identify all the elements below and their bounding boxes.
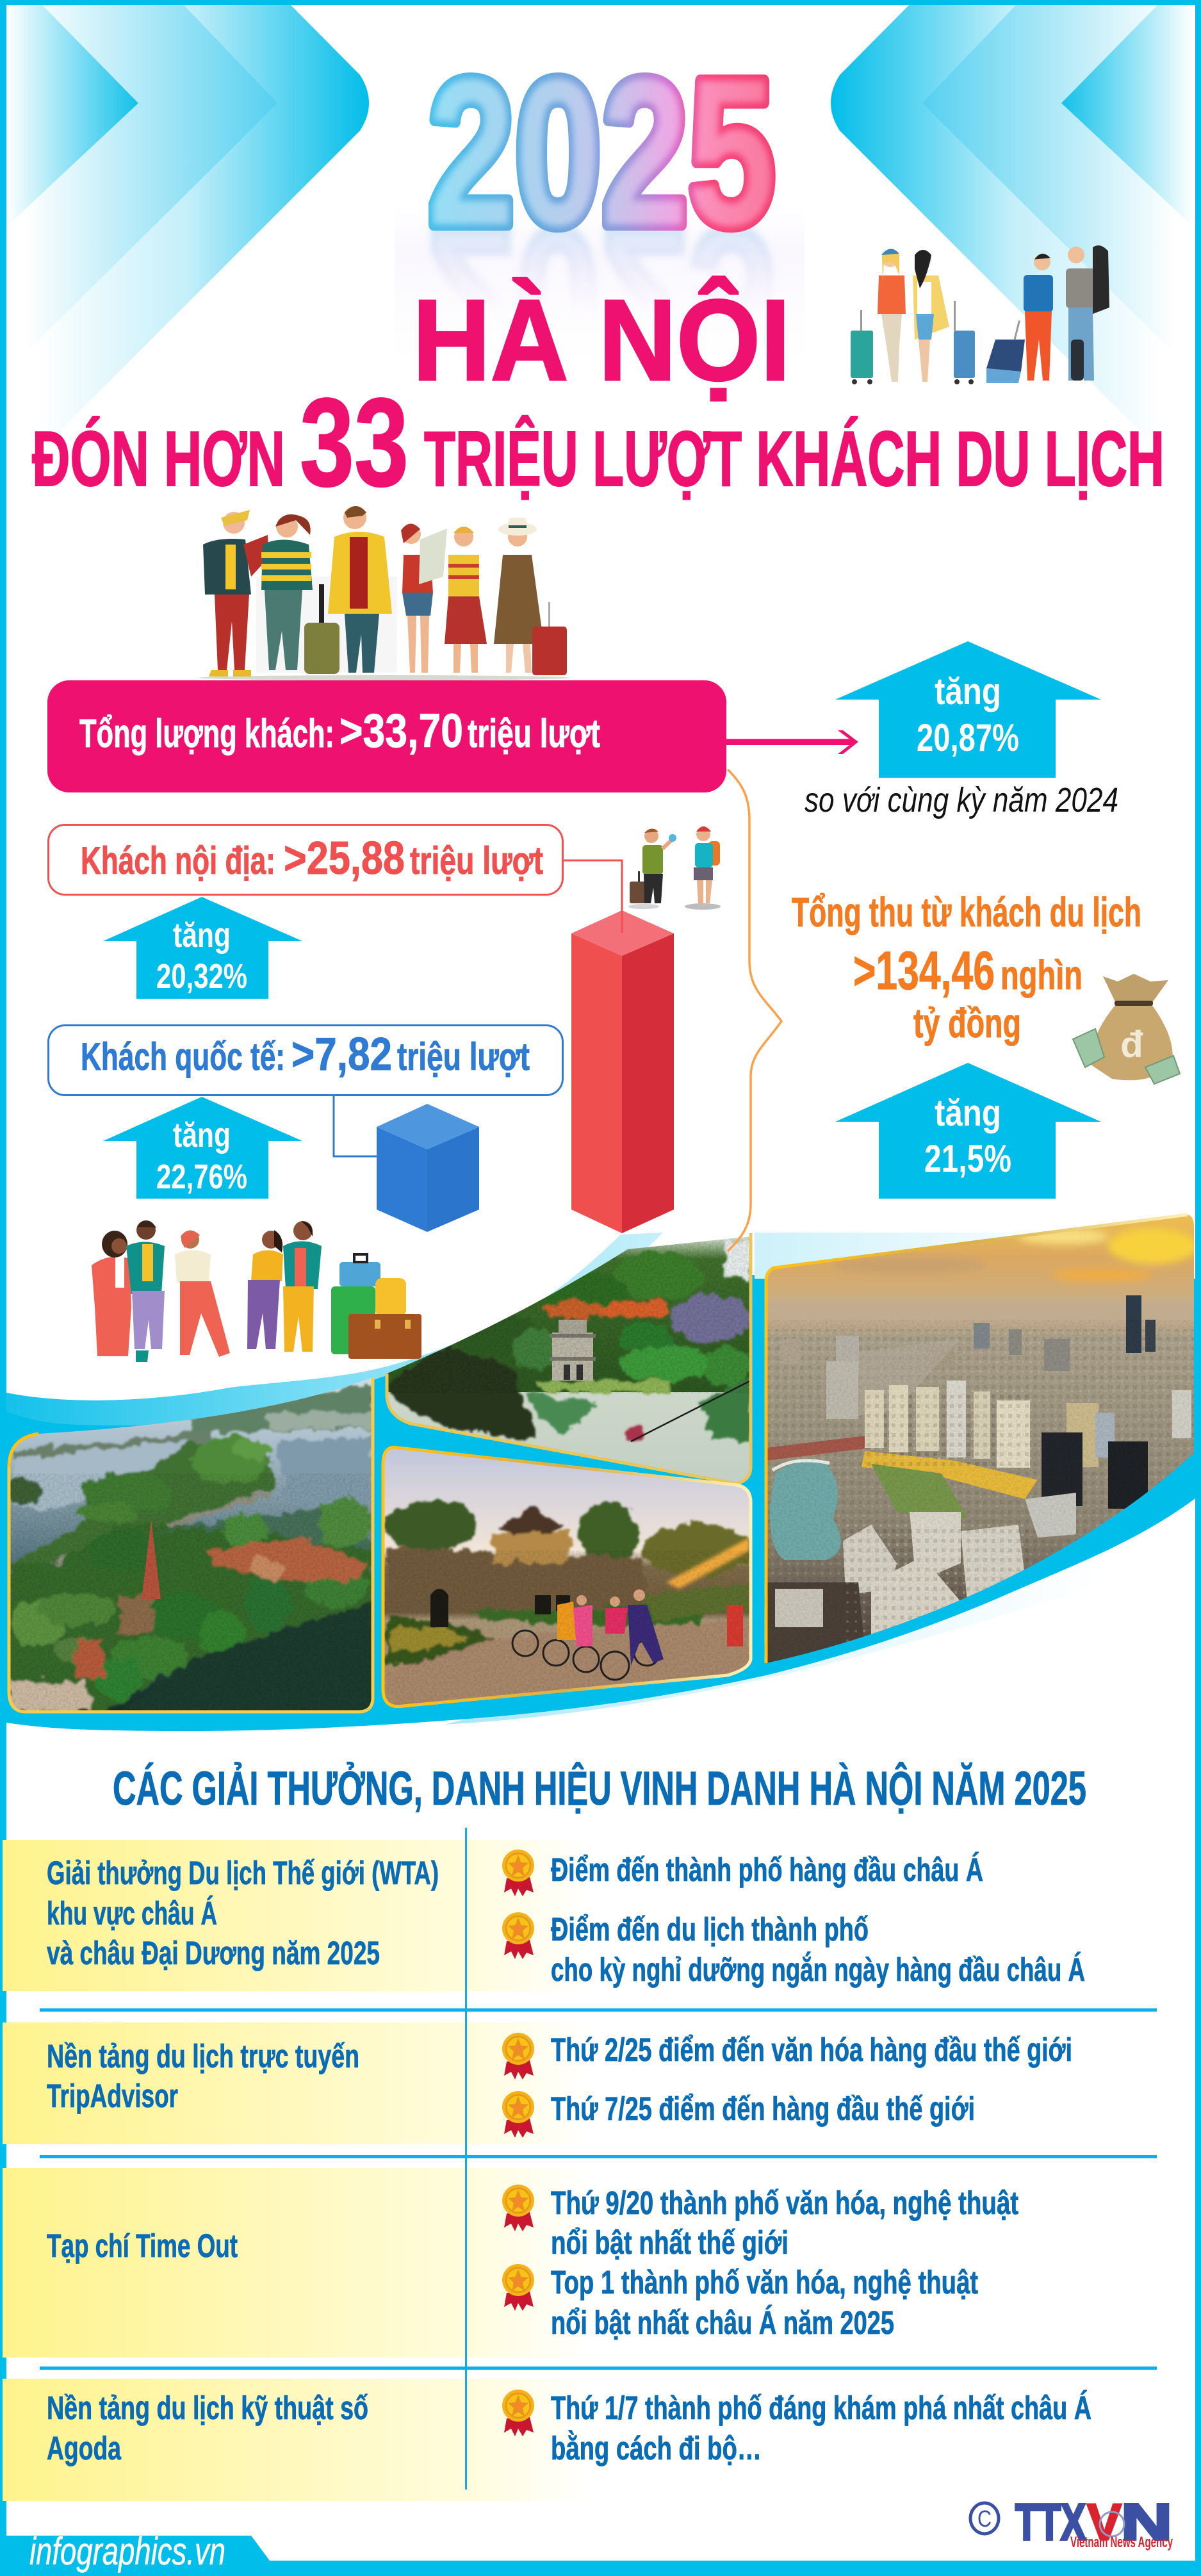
logo: TTXVN: N xyxy=(1121,2493,1172,2550)
year 2025 title: 2025 xyxy=(428,36,775,268)
award rows background xyxy=(3,1840,592,2501)
year 2025 title xyxy=(395,36,805,418)
logo: TTXVN: TTX xyxy=(1015,2493,1086,2550)
red column: domestic visitors xyxy=(571,910,674,1233)
arrow: total to growth xyxy=(726,730,858,754)
connector: international box to cube xyxy=(334,1095,377,1156)
footer site name: infographics.vn xyxy=(29,2530,225,2573)
WTA title 2 xyxy=(551,1911,1085,1988)
Agoda title xyxy=(551,2390,1091,2466)
illustration: tourists with suitcases top right xyxy=(851,245,1109,384)
domestic visitors panel: triệu lượt xyxy=(410,839,543,882)
illustration: small tourists xyxy=(628,826,721,910)
domestic visitors panel: >25,88 xyxy=(284,833,405,884)
Time Out title 2: nổi bật nhất châu Á năm 2025 xyxy=(551,2304,894,2341)
table dividers xyxy=(40,1828,1157,2490)
growth arrow 20,32% xyxy=(103,897,302,999)
year 2025 title: 2025 xyxy=(428,185,775,418)
icon: medal xyxy=(502,1850,534,1896)
icon: money bag xyxy=(1073,974,1180,1084)
blue column: international visitors xyxy=(377,1104,479,1232)
light cyan fade below swoosh xyxy=(445,1498,1195,1725)
heading: đón hơn 33 triệu lượt khách du lịch xyxy=(32,372,1164,513)
year 2025 title: 2025 xyxy=(428,36,775,268)
Agoda title: bằng cách đi bộ… xyxy=(551,2429,762,2466)
growth arrow 21,5%: 21,5% xyxy=(924,1137,1011,1180)
international visitors panel: triệu lượt xyxy=(397,1035,530,1078)
organisation: Agoda: Agoda xyxy=(47,2430,121,2466)
icon: medal xyxy=(502,1912,534,1959)
illustration: group of six travellers xyxy=(199,506,570,680)
total visitors panel: triệu lượt xyxy=(468,712,600,756)
organisation: TripAdvisor: TripAdvisor xyxy=(47,2078,178,2114)
organisation: WTA: Giải thưởng Du lịch Thế giới (WTA) xyxy=(47,1855,439,1891)
total visitors panel xyxy=(47,680,726,792)
comparison note: so với cùng kỳ năm 2024 xyxy=(805,781,1118,819)
logo: TTXVN xyxy=(970,2493,1173,2551)
light cyan swoosh band xyxy=(6,1233,663,1425)
international visitors panel: >7,82 xyxy=(291,1029,392,1080)
photo: Hanoi skyline at sunset xyxy=(766,1211,1198,1666)
illustration: five friends with luggage xyxy=(92,1220,421,1362)
bracket linking visitors to revenue xyxy=(728,769,781,1251)
icon: money bag: đ xyxy=(1120,1024,1143,1065)
Time Out title 1: Thứ 9/20 thành phố văn hóa, nghệ thuật xyxy=(551,2185,1018,2221)
growth arrow 21,5% xyxy=(835,1063,1101,1199)
photo: Thang Long citadel with cyclists xyxy=(381,1445,753,1710)
growth arrow 20,32%: tăng xyxy=(173,916,231,955)
revenue value: >134,46 xyxy=(853,940,995,1001)
total visitors panel: Tổng lượng khách: xyxy=(79,712,334,756)
heading: đón hơn 33 triệu lượt khách du lịch: ĐÓN HƠN xyxy=(32,415,285,502)
logo: TTXVN: V xyxy=(1087,2493,1122,2550)
revenue value: nghìn xyxy=(1001,952,1083,998)
organisation: TripAdvisor xyxy=(47,2038,359,2114)
growth arrow 22,76% xyxy=(103,1097,302,1199)
cyan swoosh background xyxy=(6,1275,1195,1731)
Time Out title 1 xyxy=(551,2185,1018,2261)
icon: medal xyxy=(502,2264,534,2311)
connector: domestic box to column xyxy=(563,860,622,933)
logo: TTXVN: C xyxy=(977,2506,992,2532)
award row: Agoda xyxy=(47,2390,1091,2466)
growth arrow 22,76%: tăng xyxy=(173,1116,231,1154)
organisation: Agoda: Nền tảng du lịch kỹ thuật số xyxy=(47,2390,368,2426)
WTA title 1: Điểm đến thành phố hàng đầu châu Á xyxy=(551,1851,983,1888)
heading: Hà Nội: HÀ NỘI xyxy=(413,276,790,405)
organisation: WTA: và châu Đại Dương năm 2025 xyxy=(47,1935,380,1971)
international visitors panel xyxy=(49,1025,562,1095)
award row: Time Out xyxy=(47,2185,1018,2341)
growth arrow 21,5%: tăng xyxy=(935,1092,1001,1134)
organisation: Time Out: Tạp chí Time Out xyxy=(47,2227,238,2264)
total visitors panel: >33,70 xyxy=(339,704,463,757)
organisation: Agoda xyxy=(47,2390,368,2466)
domestic visitors panel xyxy=(49,825,562,894)
organisation: WTA: khu vực châu Á xyxy=(47,1895,217,1932)
footer tab xyxy=(0,2536,1201,2576)
award row: WTA xyxy=(47,1850,1085,1988)
revenue value: tỷ đồng xyxy=(913,1000,1021,1046)
icon: medal xyxy=(502,2185,534,2231)
growth arrow 20,87%: tăng xyxy=(935,671,1001,712)
photo: Tran Quoc pagoda on West Lake xyxy=(4,1377,373,1714)
TripAdvisor title 2: Thứ 7/25 điểm đến hàng đầu thế giới xyxy=(551,2090,975,2127)
light panel behind city photo xyxy=(755,1233,1195,1279)
icon: medal xyxy=(502,2390,534,2436)
growth arrow 20,87%: 20,87% xyxy=(917,716,1019,759)
Time Out title 2: Top 1 thành phố văn hóa, nghệ thuật xyxy=(551,2264,978,2301)
organisation: TripAdvisor: Nền tảng du lịch trực tuyến xyxy=(47,2038,359,2074)
award row: TripAdvisor xyxy=(47,2031,1072,2138)
Time Out title 2 xyxy=(551,2264,978,2341)
decorative left chevrons xyxy=(6,5,369,437)
growth arrow 22,76%: 22,76% xyxy=(156,1158,247,1196)
Time Out title 1: nổi bật nhất thế giới xyxy=(551,2224,788,2261)
icon: medal xyxy=(502,2033,534,2080)
photo: Turtle Tower on Hoan Kiem Lake xyxy=(384,1233,753,1489)
growth arrow 20,87% xyxy=(835,641,1101,778)
organisation: WTA xyxy=(47,1855,439,1971)
domestic visitors panel: Khách nội địa: xyxy=(81,839,275,882)
WTA title 2: Điểm đến du lịch thành phố xyxy=(551,1911,869,1948)
growth arrow 20,32%: 20,32% xyxy=(156,957,247,996)
international visitors panel: Khách quốc tế: xyxy=(81,1035,285,1078)
decorative right chevrons xyxy=(831,5,1193,437)
icon: medal xyxy=(502,2091,534,2138)
heading: đón hơn 33 triệu lượt khách du lịch: 33 xyxy=(300,372,409,513)
revenue value xyxy=(853,940,1083,1046)
